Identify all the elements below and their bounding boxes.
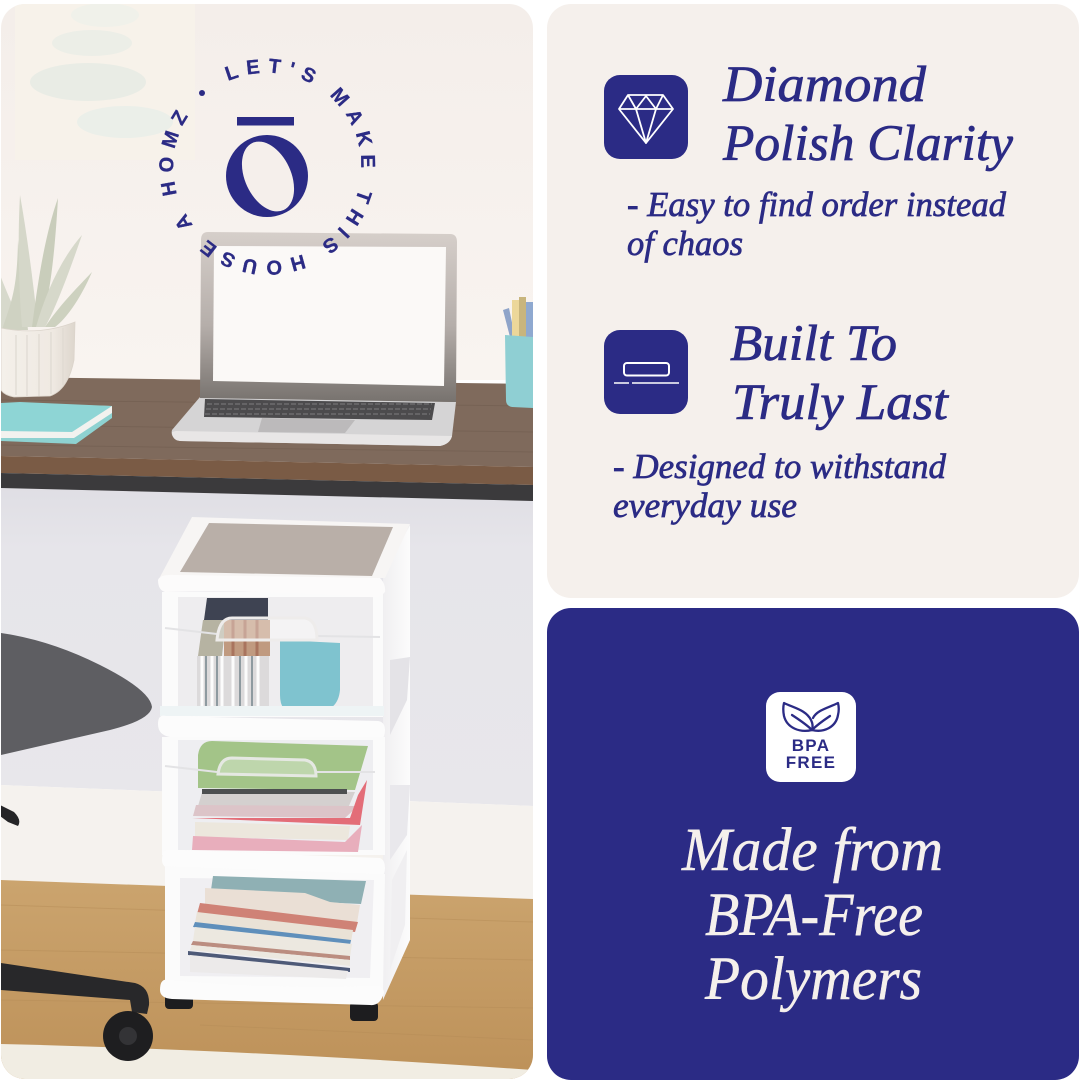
- desk top: [0, 377, 533, 467]
- heading: Diamond Polish Clarity: Diamond: [722, 57, 927, 113]
- plant pot: [1, 322, 75, 397]
- heading: Built To Truly Last: Built To: [730, 316, 897, 372]
- panel: lifestyle photo: [0, 0, 533, 1080]
- notebook: [1, 402, 112, 444]
- text: designed to withstand: - Designed to withstand: [613, 448, 947, 486]
- drawer 3 bottom rim: [160, 980, 384, 1005]
- unit side panel: [383, 525, 410, 1000]
- floor: [0, 880, 533, 1080]
- heading: Built To Truly Last: Truly Last: [732, 375, 950, 431]
- chair base and caster: [1, 963, 153, 1061]
- drawer 3: [165, 866, 385, 992]
- heading: made from BPA-free polymers: BPA-Free: [705, 882, 923, 949]
- icon: diamond: [604, 75, 688, 159]
- unit lid: [160, 517, 410, 578]
- logo circular text: [173, 73, 361, 261]
- drawer 2 rim: [162, 855, 385, 874]
- drawer 1 rim: [158, 716, 385, 737]
- heading: Diamond Polish Clarity: Polish Clarity: [722, 116, 1013, 172]
- baseboard: [0, 785, 533, 901]
- icon: flat bar: [604, 330, 688, 414]
- drawer unit: [158, 517, 410, 1021]
- text: designed to withstand: [613, 448, 947, 525]
- panel: BPA free: [547, 608, 1079, 1080]
- heading: made from BPA-free polymers: [681, 817, 943, 1013]
- heading: made from BPA-free polymers: Made from: [681, 817, 943, 884]
- icon: BPA free leaves: [766, 692, 856, 782]
- unit top rim: [158, 577, 385, 594]
- text: easy to find order: - Easy to find order instead: [627, 186, 1007, 224]
- logo dot: [199, 90, 205, 96]
- heading: Diamond Polish Clarity: [722, 57, 1013, 172]
- heading: made from BPA-free polymers: Polymers: [704, 946, 922, 1013]
- wall art frame: [30, 30, 173, 138]
- text: easy to find order: of chaos: [627, 225, 743, 263]
- heading: Built To Truly Last: [730, 316, 950, 431]
- unit feet: [165, 998, 193, 1009]
- chair seat: [1, 633, 152, 755]
- logo ring: [226, 133, 308, 220]
- panel: features: [547, 4, 1079, 598]
- lower wall: [0, 485, 533, 806]
- chair stem: [0, 805, 19, 826]
- laptop base: [172, 397, 456, 446]
- icon: BPA free leaves: FREE: [786, 753, 836, 772]
- logo: circular badge: LET'S MAKE THIS HOUSE A HOMZ: [159, 58, 376, 275]
- icon: BPA free leaves: BPA: [792, 736, 830, 755]
- logo bar: [237, 117, 294, 126]
- text: easy to find order: [627, 186, 1007, 263]
- wall: [0, 0, 533, 380]
- laptop: [172, 232, 457, 446]
- drawer 2: [162, 737, 385, 855]
- text: designed to withstand: everyday use: [613, 487, 797, 525]
- laptop screen: [200, 232, 457, 402]
- pencil cup: [503, 297, 533, 408]
- rug: [0, 1044, 533, 1080]
- desk front edge: [0, 456, 533, 485]
- plant: [0, 195, 92, 397]
- drawer 1: [160, 592, 384, 717]
- desk black strip: [0, 473, 533, 501]
